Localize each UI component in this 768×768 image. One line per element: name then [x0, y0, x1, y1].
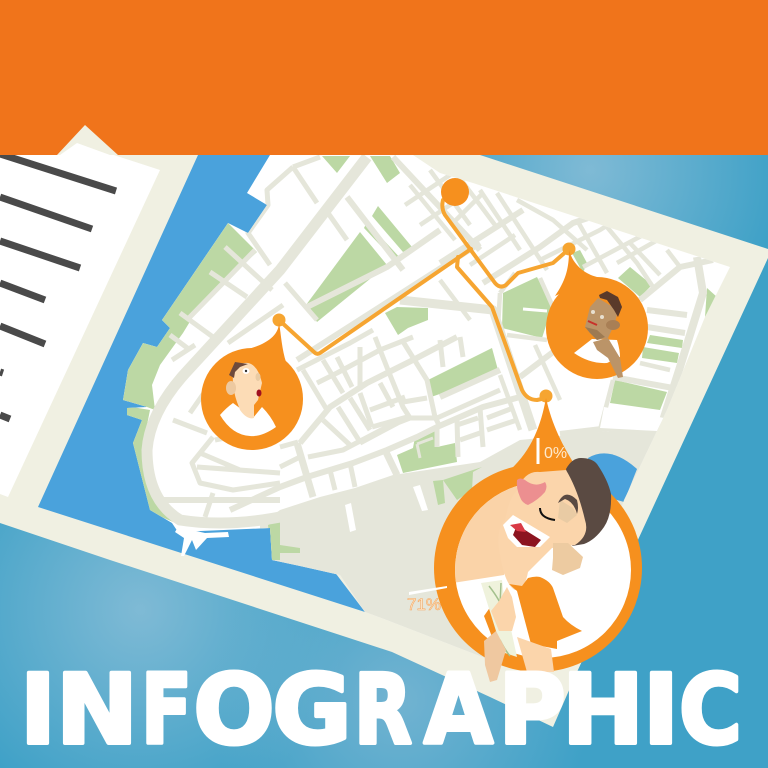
right forearm: [517, 637, 554, 672]
street network: [147, 157, 713, 523]
percent bar and label 0%: 0%: [544, 445, 567, 462]
mouth: [503, 515, 550, 547]
title: G: [272, 654, 352, 766]
route start marker: [441, 178, 469, 206]
nose: [517, 478, 546, 505]
hair: [566, 458, 611, 546]
paper map in hand: [481, 580, 517, 657]
head and neck: [233, 363, 262, 418]
eyes and mouth: [591, 310, 595, 314]
mouth: [256, 390, 262, 396]
title: I: [643, 654, 679, 766]
title: N: [56, 654, 138, 766]
lower beige land: [260, 430, 657, 658]
head: [585, 298, 618, 340]
blue inlet: [588, 453, 637, 502]
water: [38, 155, 365, 612]
forearm over title: [484, 631, 506, 682]
percent bar and label 71%: [407, 586, 447, 614]
pin: left person: [201, 314, 303, 450]
hair: [229, 362, 248, 378]
title: R: [354, 654, 412, 766]
pier details: [175, 527, 229, 556]
title: I: [20, 654, 56, 766]
white lines inside lower park: [417, 438, 433, 458]
title: O: [194, 654, 274, 766]
title: P: [499, 654, 566, 766]
ear shade and eyebrow: [558, 500, 577, 523]
shirt: [220, 403, 276, 436]
parks: [120, 156, 717, 560]
white dashes on beige land: [345, 407, 664, 532]
title: H: [562, 654, 644, 766]
route lines: [279, 200, 569, 400]
folded tab of sheet: [57, 125, 118, 155]
pin: large person: [407, 390, 642, 672]
hand shape: [552, 543, 583, 575]
title: A: [424, 654, 493, 766]
paper map sheet: [0, 155, 768, 727]
hair: [599, 291, 622, 317]
white side sheet: [0, 143, 160, 497]
map land and streets: [123, 155, 730, 658]
text lines on side sheet: [0, 154, 116, 419]
face: [498, 470, 586, 590]
arm: [593, 338, 623, 378]
chin shade: [585, 327, 605, 340]
title: C: [679, 654, 742, 766]
shirt: [509, 577, 582, 649]
percent bar and label 71%: 71%: [407, 595, 441, 614]
skin segment: [455, 486, 518, 582]
eye: [540, 508, 555, 520]
hand: [491, 587, 516, 631]
pin: right person: [546, 242, 648, 379]
orange header band: [0, 0, 768, 155]
title: F: [141, 654, 192, 766]
percent bar and label 0%: [536, 438, 567, 464]
